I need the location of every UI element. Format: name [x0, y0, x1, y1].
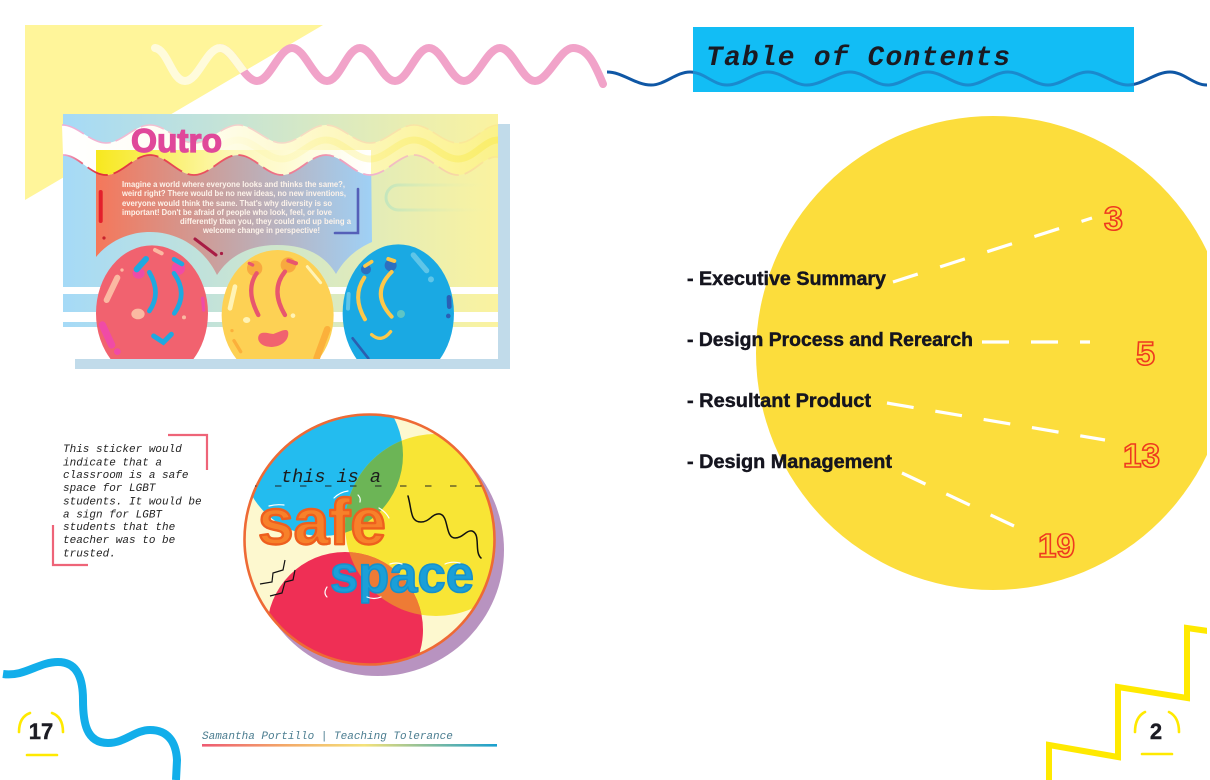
icon: black zigzag [260, 560, 295, 596]
text: space: space [330, 546, 474, 604]
text: this is a: this is a [281, 467, 381, 488]
text block: outro paragraph [121, 180, 351, 235]
icon: yellow egg [222, 250, 334, 359]
item: design management: - Design Management [687, 452, 893, 473]
sticker caption: students. It would be [63, 496, 202, 508]
text: safe: safe [258, 485, 386, 558]
blue long wave [607, 72, 1207, 85]
page number 2 [1135, 712, 1179, 754]
page number 2: 2 [1150, 719, 1162, 744]
wavy band [62, 125, 498, 176]
number 3: 3 [1104, 200, 1123, 237]
title banner [693, 27, 1134, 92]
background yellow triangle [25, 25, 323, 200]
page number 17: 17 [29, 719, 53, 744]
icon: red egg [96, 245, 208, 359]
text block: outro paragraph: everyone would think the same. That's why diversity is so [122, 199, 332, 208]
gradient text shape [96, 150, 372, 275]
text block: outro paragraph: important! Don't be afraid of people who look, feel, or love [122, 208, 332, 217]
footer credit: Samantha Portillo | Teaching Tolerance [202, 731, 453, 743]
contents list [687, 269, 973, 473]
eggs [96, 244, 454, 359]
panel decorations [101, 189, 358, 255]
pink and cream wave [155, 48, 603, 84]
dashed leader lines [887, 218, 1105, 526]
text block: outro paragraph: differently than you, they could end up being a [180, 217, 351, 226]
panel: Outro slide [62, 114, 510, 382]
sticker colour circles [246, 414, 494, 664]
big yellow circle [756, 116, 1210, 590]
blue corner wave [3, 662, 177, 780]
icon: blue egg [342, 244, 454, 359]
sticker caption: space for LGBT [63, 483, 157, 495]
sticker shadow [252, 424, 504, 676]
sticker caption: students that the [63, 522, 175, 534]
icon: black squiggle [408, 496, 481, 558]
title text: Table of Contents [706, 43, 1010, 74]
page number 17 [19, 713, 63, 755]
panel background [63, 114, 498, 359]
item: design process: - Design Process and Rerearch [687, 330, 973, 351]
item: executive summary: - Executive Summary [687, 269, 886, 290]
text block: outro paragraph: Imagine a world where everyone looks and thinks the same?, [122, 180, 345, 189]
caption corner brackets [53, 435, 207, 565]
yellow stairs line [1049, 628, 1208, 780]
heading: Outro: Outro [131, 122, 222, 159]
number 19: 19 [1038, 527, 1075, 564]
text block: outro paragraph: weird right? There would be no new ideas, no new inventions, [121, 189, 346, 198]
number 5: 5 [1136, 335, 1155, 372]
panel shadow [75, 124, 510, 369]
sticker border [244, 414, 494, 664]
text block: outro paragraph: welcome change in perspective! [202, 226, 320, 235]
pill outline [386, 185, 498, 210]
sticker caption: a sign for LGBT [63, 510, 163, 522]
sparkle arcs [269, 491, 460, 598]
sticker caption: trusted. [63, 548, 116, 560]
sticker caption: indicate that a [63, 458, 162, 470]
page numbers [1038, 200, 1160, 564]
sticker caption [63, 444, 202, 560]
sticker caption: This sticker would [63, 444, 182, 456]
item: resultant product: - Resultant Product [687, 391, 872, 412]
dashed line [255, 485, 486, 487]
number 13: 13 [1123, 437, 1160, 474]
sticker: safe space [243, 413, 504, 676]
sticker caption: classroom is a safe [63, 470, 188, 482]
sticker caption: teacher was to be [63, 535, 175, 547]
